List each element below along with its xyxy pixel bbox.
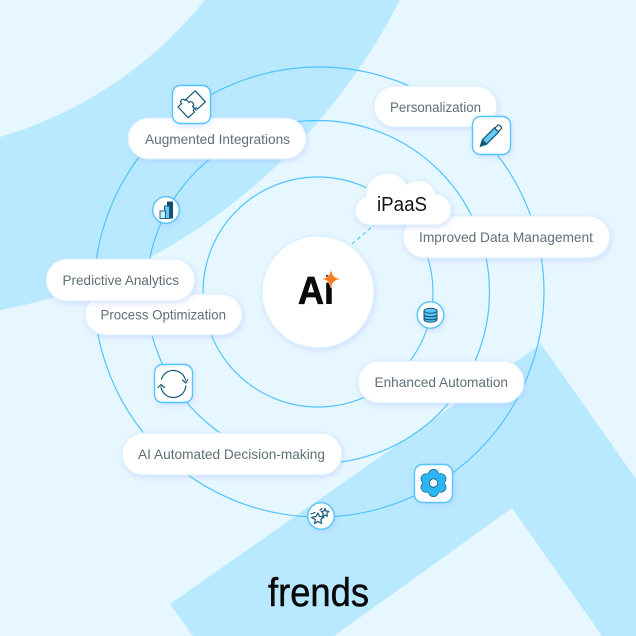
iPaaS cloud	[355, 173, 451, 225]
background: curved band top left	[0, 0, 400, 310]
pill: Enhanced Automation: Enhanced Automation	[374, 374, 508, 390]
pill: Augmented Integrations	[128, 118, 306, 159]
icon: bar chart badge	[153, 197, 179, 223]
pill: Improved Data Management: Improved Data Management	[419, 229, 593, 245]
icon: pen	[472, 116, 510, 154]
background: angular chevron bottom right	[170, 344, 636, 636]
pill: Augmented Integrations: Augmented Integrations	[145, 131, 290, 147]
pill: AI Automated Decision-making: AI Automated Decision-making	[138, 446, 325, 462]
icon: stars badge	[308, 503, 334, 529]
pill: Personalization	[374, 86, 497, 127]
pill: Enhanced Automation	[358, 361, 524, 403]
icon: sync arrows	[154, 364, 192, 402]
pill: Predictive Analytics	[46, 259, 195, 301]
icon: orange sparkle	[322, 270, 340, 288]
dashed connector from Ai to iPaaS	[352, 225, 374, 244]
center circle: Ai	[262, 236, 374, 348]
pill: Improved Data Management	[403, 216, 610, 258]
rings	[94, 67, 544, 517]
pill: Predictive Analytics: Predictive Analytics	[62, 272, 179, 288]
frends logo: frends	[268, 571, 369, 615]
pill: Personalization: Personalization	[390, 99, 481, 115]
icon: database badge	[417, 302, 444, 328]
Ai text: Ai	[298, 270, 334, 313]
pill: AI Automated Decision-making	[122, 433, 342, 475]
outer ring	[94, 67, 544, 517]
middle ring	[146, 120, 490, 464]
icon: gear	[414, 464, 452, 502]
icon: puzzle pieces	[172, 86, 210, 124]
pill: Process Optimization	[85, 294, 242, 335]
cloud shape	[355, 173, 451, 225]
inner ring	[203, 177, 433, 407]
cloud label: iPaaS	[377, 194, 427, 216]
pill: Process Optimization: Process Optimization	[100, 306, 226, 322]
